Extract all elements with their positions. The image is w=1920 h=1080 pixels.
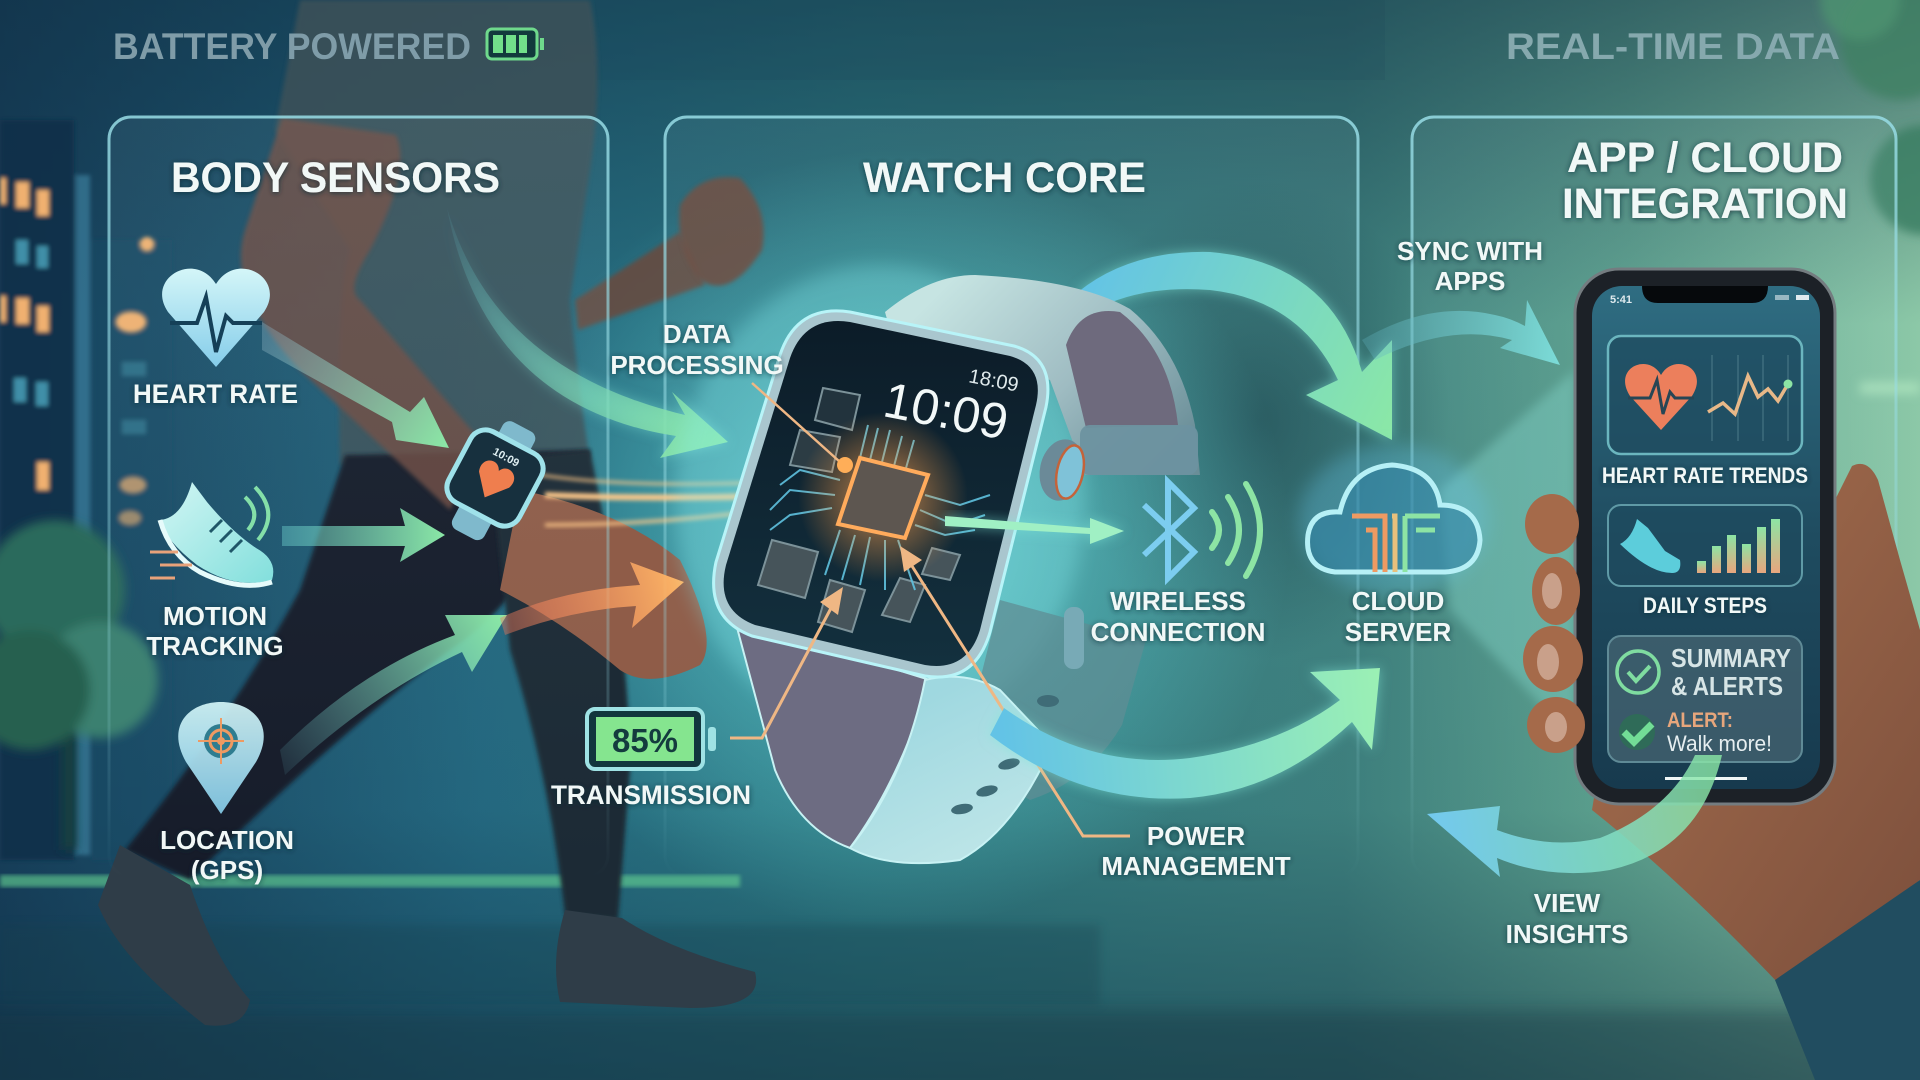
label: view insights: INSIGHTS bbox=[1506, 919, 1628, 949]
keeper bbox=[1064, 607, 1084, 669]
status: real-time data: REAL-TIME DATA bbox=[1506, 26, 1840, 67]
label: wireless connection: WIRELESS bbox=[1110, 586, 1246, 616]
label: cloud server: CLOUD bbox=[1352, 586, 1444, 616]
label: motion tracking: MOTION bbox=[163, 601, 267, 631]
status bar bbox=[1610, 294, 1809, 306]
icon: bluetooth bbox=[1144, 482, 1260, 578]
circuit traces bbox=[770, 425, 990, 590]
tree left bbox=[0, 520, 158, 850]
signal waves bbox=[1212, 484, 1260, 576]
leader: transmission bbox=[730, 587, 843, 738]
label: wireless connection: CONNECTION bbox=[1091, 617, 1265, 647]
label: cloud server: SERVER bbox=[1345, 617, 1451, 647]
heading: watch core: WATCH CORE bbox=[863, 154, 1146, 202]
heading: app cloud integration: APP / CLOUD bbox=[1567, 134, 1843, 182]
chip glow bbox=[798, 412, 968, 582]
leader: data processing bbox=[752, 383, 853, 473]
notch bbox=[1642, 286, 1768, 303]
icon: battery 85%: 85% bbox=[612, 722, 678, 759]
back leg bbox=[125, 450, 590, 880]
label: motion tracking bbox=[146, 601, 284, 661]
label: view insights bbox=[1506, 888, 1628, 949]
label: view insights: VIEW bbox=[1534, 888, 1601, 918]
phone screen bbox=[1592, 286, 1820, 789]
card: summary and alerts: & ALERTS bbox=[1671, 671, 1783, 701]
arrow: motion to wrist bbox=[282, 508, 445, 562]
label: sync with apps: SYNC WITH bbox=[1397, 236, 1543, 266]
fingernails bbox=[1537, 573, 1567, 742]
crown bbox=[1034, 435, 1090, 505]
big arrow: cloud return bbox=[990, 668, 1380, 799]
ground with green light strip bbox=[0, 875, 1920, 1080]
watch glow bbox=[675, 265, 1085, 735]
label: transmission: TRANSMISSION bbox=[551, 780, 751, 810]
orange data streams bbox=[540, 475, 810, 525]
label: location gps: (GPS) bbox=[191, 855, 263, 885]
arrow: location to wrist bbox=[280, 615, 507, 775]
label: heart rate trends: HEART RATE TRENDS bbox=[1602, 463, 1808, 488]
case bbox=[714, 311, 1048, 677]
phone bbox=[1575, 269, 1835, 804]
label: wireless connection bbox=[1091, 586, 1265, 647]
label: power management: POWER bbox=[1147, 821, 1245, 851]
wrist watch bbox=[430, 408, 558, 553]
label: daily steps: DAILY STEPS bbox=[1643, 593, 1767, 618]
fist bbox=[679, 177, 764, 286]
circuit blocks bbox=[758, 388, 960, 632]
arrow: view insights bbox=[1427, 755, 1722, 877]
card: summary and alerts bbox=[1608, 636, 1802, 762]
status bar: 5:41 bbox=[1610, 294, 1632, 306]
icon: heart rate bbox=[162, 269, 270, 367]
label: power management bbox=[1101, 821, 1291, 881]
arrow: long curve to watch bbox=[447, 208, 728, 458]
label: data processing: PROCESSING bbox=[610, 350, 784, 380]
sleeve bbox=[1775, 880, 1920, 1080]
icon: location pin bbox=[178, 702, 264, 814]
home bar bbox=[1665, 777, 1747, 780]
hand back bbox=[1592, 464, 1920, 1080]
strap bottom light bbox=[850, 677, 1052, 863]
label: cloud server bbox=[1345, 586, 1451, 647]
strap back loop bbox=[960, 600, 1146, 800]
big arrow: watch to cloud bbox=[1078, 252, 1392, 440]
label: motion tracking: TRACKING bbox=[146, 631, 284, 661]
watch bbox=[675, 265, 1200, 863]
front shoe bbox=[556, 910, 756, 1008]
front leg bbox=[490, 450, 630, 920]
leader: power management bbox=[900, 546, 1130, 836]
card: summary and alerts: Walk more! bbox=[1667, 731, 1772, 756]
label: power management: MANAGEMENT bbox=[1101, 851, 1291, 881]
icon: cloud bbox=[1299, 445, 1489, 595]
strap top bbox=[885, 275, 1200, 475]
icon: battery bbox=[487, 29, 544, 59]
arrow: orange to watch bbox=[500, 562, 684, 635]
hand bbox=[500, 490, 707, 679]
label: data processing bbox=[610, 319, 784, 380]
screen bbox=[724, 321, 1038, 666]
label: location gps bbox=[160, 825, 294, 885]
shirt bbox=[275, 0, 598, 465]
heading: app cloud integration bbox=[1562, 134, 1848, 228]
heading: body sensors: BODY SENSORS bbox=[171, 154, 500, 202]
wrist watch: 10:09 bbox=[491, 446, 521, 470]
back arm bbox=[575, 232, 705, 330]
arrow: chip to wireless bbox=[945, 516, 1124, 544]
back shoe bbox=[98, 845, 250, 1026]
card: daily steps bbox=[1608, 505, 1802, 586]
city buildings with lit windows bbox=[0, 120, 172, 860]
label: sync with apps bbox=[1397, 236, 1543, 296]
panel: watch core bbox=[665, 117, 1358, 877]
strap bottom mauve bbox=[735, 620, 930, 848]
tree right bbox=[1820, 0, 1920, 394]
icon: shoe bbox=[150, 482, 273, 585]
time: 10:09 bbox=[879, 372, 1013, 450]
small time: 18:09 bbox=[967, 365, 1020, 397]
arrow: heart rate to wrist bbox=[262, 322, 449, 448]
runner figure bbox=[98, 0, 764, 1026]
card: heart rate trends bbox=[1608, 336, 1802, 454]
arrow: sync with apps bbox=[1362, 300, 1560, 365]
label: data processing: DATA bbox=[663, 319, 731, 349]
panel: app cloud bbox=[1412, 117, 1896, 877]
label: location gps: LOCATION bbox=[160, 825, 294, 855]
card: summary and alerts: ALERT: bbox=[1667, 709, 1733, 732]
icon: battery 85% bbox=[587, 709, 716, 769]
upper arm and forearm bbox=[241, 118, 480, 510]
status: battery powered: BATTERY POWERED bbox=[113, 26, 471, 67]
card: summary and alerts: SUMMARY bbox=[1671, 643, 1791, 673]
label: heart rate: HEART RATE bbox=[133, 379, 298, 409]
heading: app cloud integration: INTEGRATION bbox=[1562, 180, 1848, 228]
panel: body sensors bbox=[109, 117, 608, 877]
fingers bbox=[1523, 494, 1585, 753]
label: sync with apps: APPS bbox=[1435, 266, 1505, 296]
chip bbox=[838, 458, 928, 538]
